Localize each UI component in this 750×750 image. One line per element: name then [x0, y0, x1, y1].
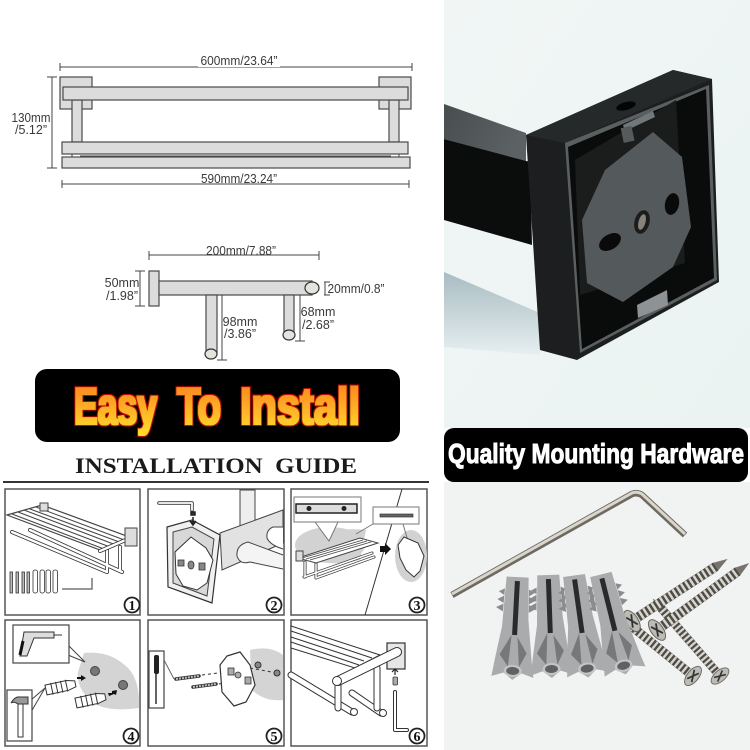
- number 5: 5: [270, 730, 278, 745]
- hammer callout: [7, 688, 45, 741]
- dimension: 68mm: [295, 295, 335, 341]
- side view rack: [149, 271, 319, 359]
- hex key: [62, 578, 92, 589]
- dimension: 130mm height: 130mm: [12, 111, 50, 125]
- dimension: 50mm: /1.98”: [106, 289, 138, 303]
- step 2 panel: [148, 489, 284, 615]
- set screw hole: [615, 100, 637, 112]
- banner: Easy To Install: Install: [240, 378, 360, 436]
- bracket front rim: [565, 85, 717, 353]
- dimension: 68mm: /2.68”: [302, 318, 334, 332]
- wall nuts: [255, 662, 280, 676]
- dimension: 200mm: [149, 244, 319, 260]
- bracket top face: [526, 70, 712, 143]
- bracket interior: [568, 89, 714, 349]
- number 1: 1: [128, 599, 136, 614]
- rail top face: [444, 104, 526, 161]
- dimension: 98mm: [217, 295, 257, 360]
- step 5 panel: [148, 620, 284, 746]
- screwdriver callout: [149, 651, 174, 708]
- banner: Easy To Install: To: [177, 378, 221, 436]
- dimension: 600mm width: 600mm/23.64”: [200, 54, 278, 68]
- bottom clip: [637, 290, 668, 318]
- hex key: [452, 492, 685, 595]
- diagonal wall line: [365, 489, 402, 615]
- shelf illustration: [296, 538, 378, 578]
- number 2: 2: [270, 599, 278, 614]
- shelf close-up: [291, 626, 405, 716]
- number 6: 6: [414, 730, 420, 745]
- drill callout: [13, 625, 85, 663]
- bit callout: [356, 507, 419, 541]
- dimension: 130mm height: [12, 77, 57, 168]
- shelf illustration: [7, 503, 137, 572]
- bracket frame: [167, 520, 220, 603]
- wall anchors: [491, 569, 646, 681]
- step 6 panel: [291, 620, 427, 746]
- wall shading: [250, 648, 283, 700]
- photo: mounting hardware: [444, 482, 750, 750]
- banner: Easy To Install: Easy: [74, 378, 157, 436]
- tube illustration: [220, 490, 283, 570]
- photo: black bracket close-up: [444, 0, 750, 428]
- table shadow: [444, 272, 540, 355]
- hex key and arrow: [159, 503, 196, 525]
- plate holes: [596, 192, 681, 255]
- dimension: 200mm: 200mm/7.88”: [206, 244, 276, 258]
- octagonal plate: [582, 132, 691, 302]
- screws: [176, 668, 277, 687]
- wall plugs: [45, 678, 107, 709]
- dimension: 50mm: [105, 271, 145, 306]
- top clip: [623, 111, 655, 131]
- dimension: 98mm: /3.86”: [224, 327, 256, 341]
- screws: [602, 549, 750, 688]
- panel: side dimension drawing: [105, 244, 384, 360]
- heading: installation guide: INSTALLATION GUIDE: [75, 453, 357, 478]
- arrows: [77, 675, 117, 696]
- arrow: [380, 543, 391, 555]
- holes: [90, 666, 128, 690]
- number 4: 4: [128, 730, 134, 745]
- banner: Easy To Install: [35, 369, 400, 442]
- screws and anchors: [10, 570, 58, 593]
- number 3: 3: [414, 599, 420, 614]
- bracket outer body: [526, 70, 719, 360]
- dimension: 590mm width: [62, 172, 409, 188]
- dimension: 50mm: 50mm: [105, 276, 139, 290]
- dimension: 130mm height: /5.12”: [15, 123, 47, 137]
- banner: quality mounting hardware: [444, 428, 748, 482]
- level callout: [294, 497, 361, 541]
- dimension: 68mm: 68mm: [301, 305, 335, 319]
- rail dark side: [444, 139, 532, 245]
- hex key and grub screw: [392, 669, 407, 730]
- dimension: 590mm width: 590mm/23.24”: [201, 172, 277, 186]
- panel: front dimension drawing: [12, 54, 412, 188]
- step 3 panel: [291, 489, 427, 615]
- dimension: 600mm width: [60, 54, 412, 71]
- dimension: 20mm: 20mm/0.8”: [328, 282, 384, 296]
- rack front view: [60, 77, 411, 168]
- wall shading: [295, 527, 427, 582]
- bracket: [220, 652, 255, 706]
- bracket: [398, 537, 424, 577]
- step 4 panel: [5, 620, 140, 746]
- dimension: 98mm: 98mm: [223, 315, 257, 329]
- wall shading: [78, 653, 139, 709]
- step 1 panel: [5, 489, 140, 615]
- bracket back wall: [575, 100, 685, 295]
